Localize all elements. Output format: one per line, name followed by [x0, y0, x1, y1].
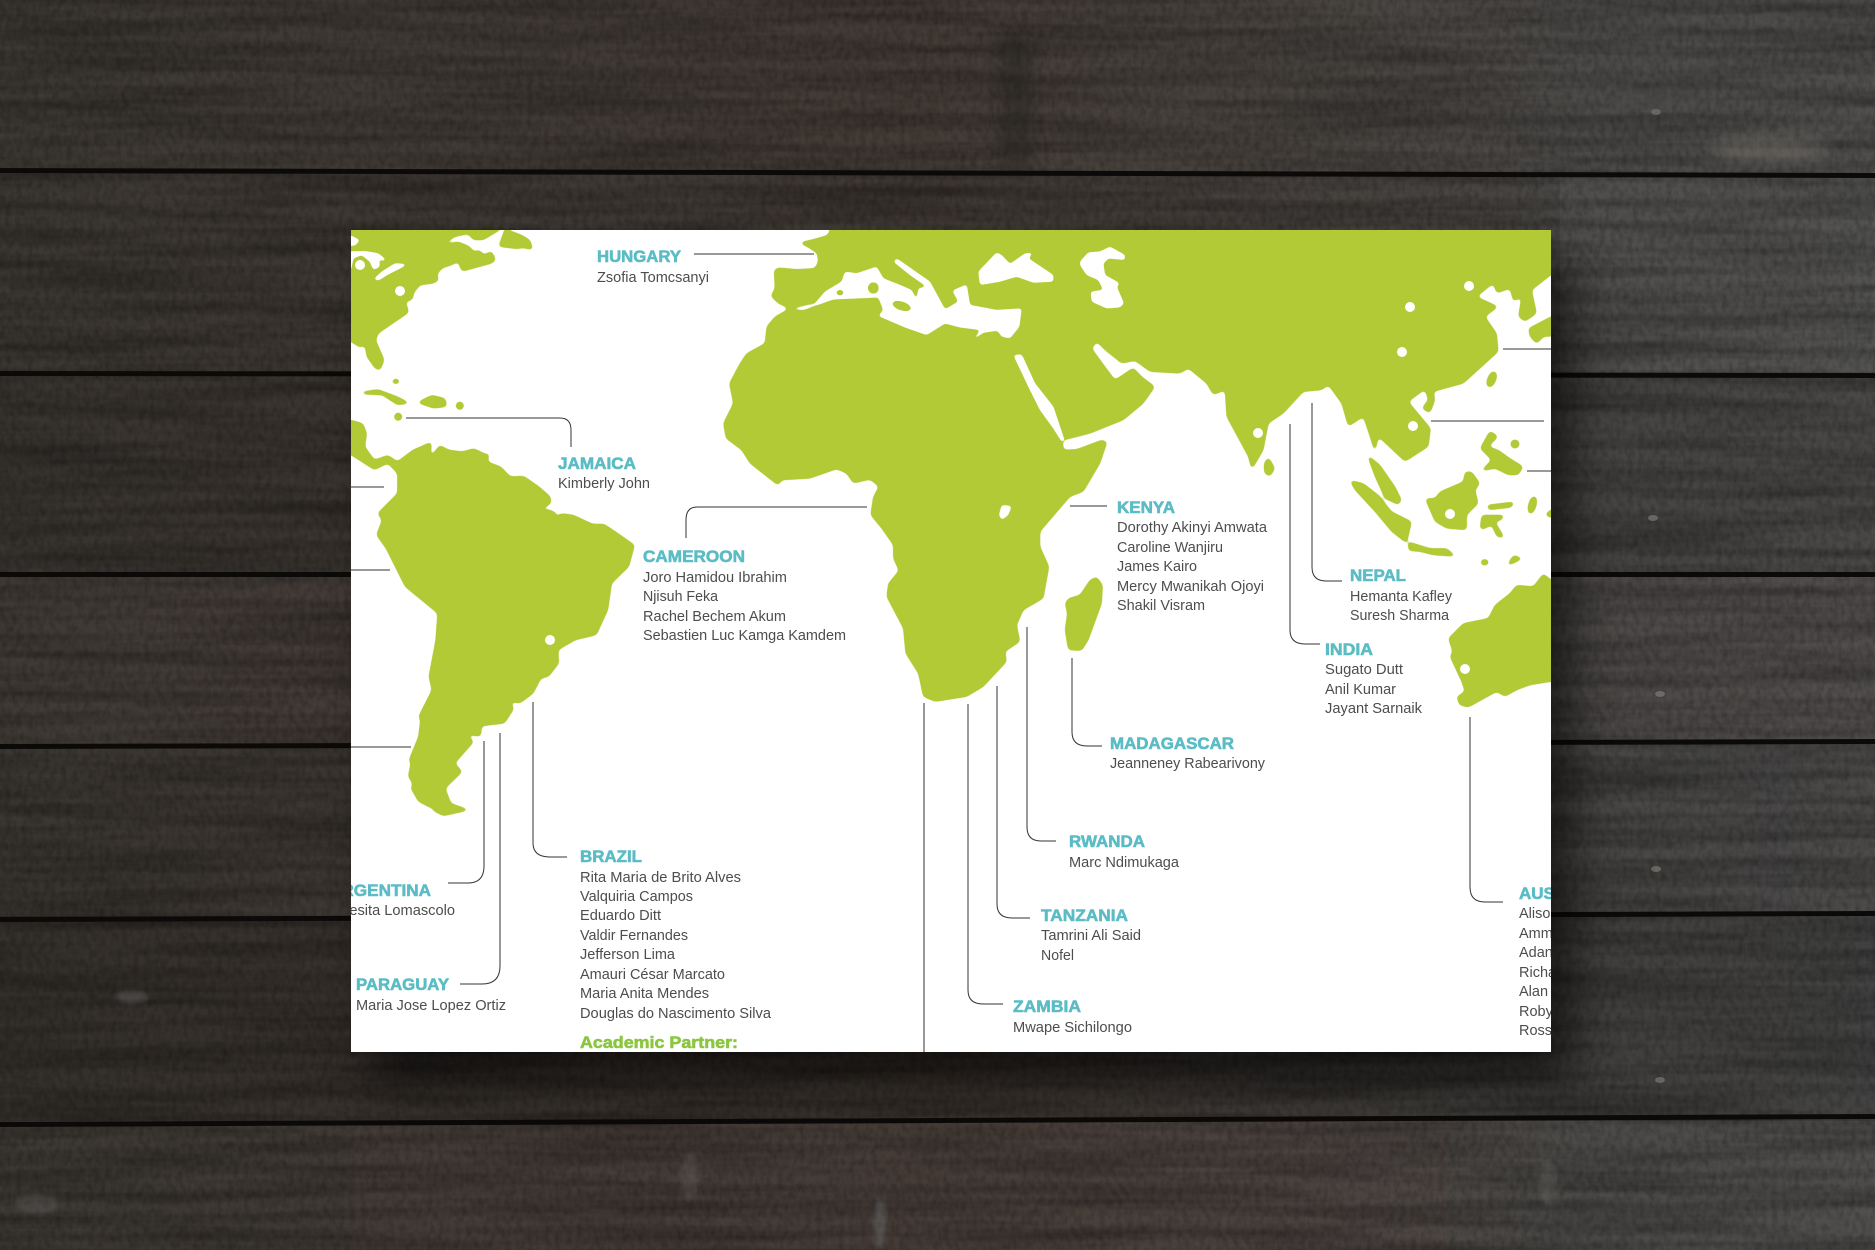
- leader: Cameroon: [686, 507, 867, 538]
- lake: Victoria: [999, 505, 1012, 520]
- label: Kenya: Shakil Visram: [1117, 598, 1205, 614]
- label: Cameroon: Joro Hamidou Ibrahim: [643, 570, 787, 586]
- leader: Madagascar: [1072, 658, 1102, 746]
- label: Zambia: ZAMBIA: [1013, 997, 1081, 1016]
- leader: right stub 2: [1431, 420, 1544, 422]
- label: Tanzania: [1041, 906, 1141, 964]
- label: Nepal: Suresh Sharma: [1350, 608, 1450, 624]
- sea: Caspian Sea: [1080, 247, 1125, 308]
- label: Brazil: Maria Anita Mendes: [580, 986, 709, 1002]
- label: Brazil: Academic Partner:: [580, 1033, 738, 1052]
- label: Jamaica: [558, 454, 650, 492]
- label: Cameroon: Sebastien Luc Kamga Kamdem: [643, 628, 846, 644]
- label: Brazil: Valquiria Campos: [580, 889, 693, 905]
- leader: Paraguay: [460, 733, 500, 984]
- leader: right stub 3: [1527, 470, 1551, 472]
- label: Australia: Roby: [1519, 1004, 1554, 1020]
- label: Brazil: Valdir Fernandes: [580, 928, 688, 944]
- land: New Guinea edge: [1544, 509, 1567, 518]
- leader: long bottom line: [923, 703, 925, 1052]
- leader: Zambia: [968, 704, 1003, 1004]
- leader: left stub 1: [351, 486, 384, 488]
- label: Kenya: Mercy Mwanikah Ojoyi: [1117, 579, 1264, 595]
- label: Kenya: James Kairo: [1117, 559, 1197, 575]
- land: Sumatra: [1349, 480, 1412, 543]
- leader: left stub 2: [351, 569, 390, 571]
- label: Nepal: Hemanta Kafley: [1350, 589, 1453, 605]
- leader: left stub 3: [351, 746, 411, 748]
- label: Brazil: Eduardo Ditt: [580, 908, 661, 924]
- map: white city dots: [355, 260, 1474, 674]
- map: land masses: [325, 210, 1573, 816]
- label: Australia: Richa: [1519, 965, 1557, 981]
- label: India: Sugato Dutt: [1325, 662, 1403, 678]
- land: Caribbean islands: [361, 379, 464, 421]
- label: Cameroon: Njisuh Feka: [643, 589, 719, 605]
- label: Nepal: NEPAL: [1350, 566, 1406, 585]
- leader: right stub 1: [1503, 348, 1551, 350]
- land: Java: [1408, 542, 1457, 557]
- leader: Brazil: [533, 702, 567, 857]
- label: Hungary: HUNGARY: [597, 247, 682, 266]
- label: Nepal: [1350, 566, 1453, 624]
- land: Timor: [1506, 555, 1523, 567]
- label: Australia: AUSTRALIA: [1519, 884, 1617, 903]
- leader: Argentina: [448, 741, 484, 883]
- label: Paraguay: [356, 975, 506, 1014]
- paper drop shadow: [372, 262, 1572, 1082]
- sea: Mediterranean: [789, 258, 1022, 343]
- label: Madagascar: [1110, 734, 1266, 772]
- label: Rwanda: RWANDA: [1069, 832, 1145, 851]
- label: Brazil: BRAZIL: [580, 847, 642, 866]
- sea: Red Sea: [1013, 354, 1065, 442]
- label: Argentina: [329, 881, 455, 919]
- label: Cameroon: [643, 547, 846, 644]
- land: Sulawesi upper: [1487, 502, 1515, 510]
- label: Brazil: Jefferson Lima: [580, 947, 676, 963]
- land: Sri Lanka: [1264, 458, 1274, 476]
- land: Africa, Europe and Asia: [723, 210, 1573, 702]
- label: Kenya: Caroline Wanjiru: [1117, 540, 1223, 556]
- map: inland seas: [338, 236, 1125, 520]
- leader: Jamaica: [406, 418, 571, 447]
- land: Australia: [1448, 574, 1551, 708]
- label: Paraguay: PARAGUAY: [356, 975, 450, 994]
- leader: Hungary: [694, 253, 814, 255]
- North American lakes: [338, 236, 408, 281]
- label: Kenya: [1117, 498, 1268, 614]
- label: Tanzania: TANZANIA: [1041, 906, 1128, 925]
- label: Madagascar: MADAGASCAR: [1110, 734, 1234, 753]
- label: Brazil: Douglas do Nascimento Silva: [580, 1006, 772, 1022]
- label: Hungary: [597, 247, 709, 286]
- sea: Black Sea: [978, 252, 1053, 285]
- leader lines: [351, 254, 1551, 1052]
- label: Brazil: Amauri César Marcato: [580, 967, 725, 983]
- leader: Australia: [1470, 717, 1503, 902]
- label: Madagascar: Jeanneney Rabearivony: [1110, 756, 1266, 772]
- land: North America: [351, 230, 504, 370]
- label: Rwanda: Marc Ndimukaga: [1069, 855, 1180, 871]
- land: South and Central America: [325, 420, 635, 816]
- label: Australia: Amm: [1519, 926, 1553, 942]
- land: small islands: [1480, 370, 1539, 566]
- leader: Kenya: [1070, 505, 1107, 507]
- label: Zambia: [1013, 997, 1132, 1036]
- label: Argentina: ARGENTINA: [329, 881, 431, 900]
- label: Zambia: Mwape Sichilongo: [1013, 1020, 1132, 1036]
- label: Australia: Ross: [1519, 1023, 1552, 1039]
- land: Japan: [1528, 316, 1551, 343]
- label: Brazil: [580, 847, 772, 1052]
- label: India: [1325, 640, 1423, 717]
- label: Jamaica: Kimberly John: [558, 476, 650, 492]
- label: Tanzania: Tamrini Ali Said: [1041, 928, 1141, 944]
- leader: Rwanda: [1027, 627, 1056, 841]
- label: Kenya: KENYA: [1117, 498, 1175, 517]
- land: Malay peninsula island: [1368, 457, 1402, 505]
- label: Brazil: Rita Maria de Brito Alves: [580, 870, 741, 886]
- map: Mediterranean islands: [837, 282, 912, 313]
- label: India: INDIA: [1325, 640, 1373, 659]
- label: Kenya: Dorothy Akinyi Amwata: [1117, 520, 1268, 536]
- leader: Nepal: [1312, 403, 1342, 581]
- label: Australia: [1519, 884, 1617, 1039]
- label: Australia: Alan: [1519, 984, 1548, 1000]
- land: Madagascar: [1065, 577, 1103, 651]
- label: Paraguay: Maria Jose Lopez Ortiz: [356, 998, 506, 1014]
- land: Sulawesi lower: [1480, 515, 1505, 538]
- label: Cameroon: Rachel Bechem Akum: [643, 609, 786, 625]
- label: India: Anil Kumar: [1325, 682, 1396, 698]
- label: India: Jayant Sarnaik: [1325, 701, 1423, 717]
- land: Borneo: [1425, 472, 1480, 530]
- leader: India: [1290, 424, 1320, 644]
- label: Jamaica: JAMAICA: [558, 454, 636, 473]
- label: Australia: Adan: [1519, 945, 1553, 961]
- label: Hungary: Zsofia Tomcsanyi: [597, 270, 709, 286]
- label: Tanzania: Nofel: [1041, 948, 1074, 964]
- label: Rwanda: [1069, 832, 1180, 871]
- label: Australia: Aliso: [1519, 906, 1550, 922]
- leader: Tanzania: [997, 686, 1030, 918]
- paper sheet with map: [325, 210, 1617, 1052]
- land: Greenland: [498, 230, 532, 250]
- label: Cameroon: CAMEROON: [643, 547, 745, 566]
- land: Philippines: [1480, 431, 1523, 475]
- label: Argentina: Teresita Lomascolo: [329, 903, 455, 919]
